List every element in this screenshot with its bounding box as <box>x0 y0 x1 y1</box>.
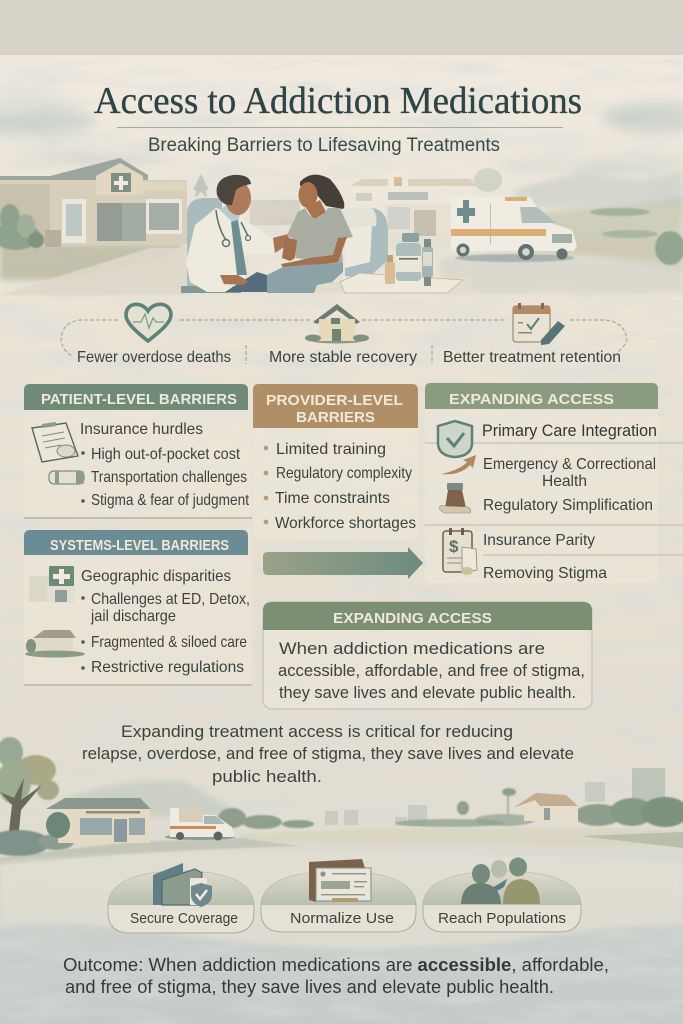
header <box>253 384 418 428</box>
bottom ground band <box>0 851 683 948</box>
barrier list <box>81 568 250 676</box>
house right <box>513 793 578 821</box>
header <box>24 530 248 555</box>
barrier list: Time constraints <box>275 490 390 507</box>
header: EXPANDING ACCESS <box>449 391 614 408</box>
header <box>425 383 658 409</box>
icon: rising arrow <box>441 455 476 474</box>
strategy list: Primary Care Integration <box>482 422 657 440</box>
icon: heart with pulse <box>126 304 171 341</box>
background window block <box>250 200 300 225</box>
distant hospital <box>350 172 480 250</box>
hero illustration <box>0 158 683 295</box>
paragraph <box>82 722 574 786</box>
barrier list: Geographic disparities <box>81 568 231 585</box>
outcome statement: Outcome: When addiction medications are accessible, affordable, <box>63 955 609 975</box>
icon cards <box>108 858 581 933</box>
paragraph: Expanding treatment access is critical for reducing <box>121 722 513 741</box>
icon: house <box>305 304 369 344</box>
strategy list: Regulatory Simplification <box>483 497 653 514</box>
icon: calendar with pen <box>513 303 565 345</box>
benefit labels: Better treatment retention <box>443 349 621 366</box>
summary text <box>278 639 585 702</box>
pharmacy building <box>0 158 187 247</box>
card: normalize use <box>261 859 416 932</box>
header: EXPANDING ACCESS <box>333 611 492 627</box>
patient <box>267 175 353 293</box>
icon: clipboard <box>32 422 78 462</box>
icon: hospital <box>29 566 75 603</box>
top blank band <box>0 0 683 60</box>
distant hills <box>60 780 240 820</box>
panel: expanding access strategies <box>425 383 683 583</box>
right shrubs <box>590 208 683 265</box>
benefit labels: Fewer overdose deaths <box>77 349 231 366</box>
icon: clipboard with dollar: $ <box>449 537 459 556</box>
summary text: When addiction medications are <box>279 639 545 658</box>
barrier list: jail discharge <box>90 608 176 625</box>
benefits row <box>61 303 627 366</box>
barrier list: Limited training <box>276 441 386 458</box>
barrier list: Transportation challenges <box>91 469 247 486</box>
card: reach populations <box>423 858 581 932</box>
strategy list: Insurance Parity <box>483 532 595 549</box>
table <box>314 273 474 293</box>
outcome statement: and free of stigma, they save lives and elevate public health. <box>65 977 554 997</box>
barrier list <box>80 421 249 509</box>
panel: expanding access summary <box>263 602 592 709</box>
icon: shield <box>438 421 472 457</box>
ground and road <box>0 172 683 295</box>
label: Normalize Use <box>290 910 394 927</box>
dashed connector <box>61 320 627 364</box>
panel: provider-level barriers <box>253 384 418 540</box>
strategy list: Removing Stigma <box>483 565 607 582</box>
ground strips <box>0 828 683 866</box>
barrier list: Insurance hurdles <box>80 421 203 438</box>
icon: books and shield <box>153 863 212 907</box>
bush <box>0 204 44 250</box>
paragraph: relapse, overdose, and free of stigma, they save lives and elevate <box>82 744 574 763</box>
arrow <box>263 547 423 579</box>
icon: clinic <box>25 630 85 658</box>
tree line <box>218 788 683 829</box>
icon: pill bottle <box>49 471 84 484</box>
distant skyline <box>325 768 665 826</box>
header <box>263 602 592 630</box>
distant tree <box>193 168 502 198</box>
barrier list: Restrictive regulations <box>91 659 244 676</box>
barrier list <box>264 441 416 532</box>
left tree <box>0 737 74 856</box>
benefit labels <box>77 349 621 366</box>
icon: open binder <box>309 859 371 902</box>
subtitle: Breaking Barriers to Lifesaving Treatments <box>148 135 500 156</box>
barrier list: Regulatory complexity <box>276 465 412 482</box>
title divider <box>117 127 563 128</box>
background clouds <box>0 88 683 174</box>
summary text: accessible, affordable, and free of stigma, <box>278 661 585 680</box>
outcome statement <box>63 955 609 997</box>
icon: clipboard with dollar <box>443 528 477 575</box>
barrier list: High out-of-pocket cost <box>91 446 240 463</box>
strategy list <box>482 422 657 582</box>
header: PROVIDER-LEVEL <box>266 392 403 409</box>
barrier list: Fragmented & siloed care <box>91 634 247 651</box>
panel: systems-level barriers <box>24 530 252 685</box>
barrier list: Challenges at ED, Detox, <box>91 591 250 608</box>
header: SYSTEMS-LEVEL BARRIERS <box>50 538 229 554</box>
header <box>24 384 248 410</box>
header: BARRIERS <box>296 409 375 426</box>
panel: patient-level barriers <box>24 384 252 518</box>
small ambulance <box>165 807 235 840</box>
card: secure coverage <box>108 863 254 933</box>
lower landscape <box>0 737 683 866</box>
header: PATIENT-LEVEL BARRIERS <box>41 392 237 408</box>
icon: mortar <box>440 483 471 513</box>
summary text: they save lives and elevate public health. <box>279 683 576 702</box>
icon: group of people <box>461 858 540 904</box>
barrier list: Stigma & fear of judgment <box>91 492 249 509</box>
medication bottles <box>385 233 433 286</box>
doctor <box>186 175 290 292</box>
title: Access to Addiction Medications <box>94 80 582 122</box>
benefit labels: More stable recovery <box>269 349 417 366</box>
strategy list: Health <box>542 473 587 490</box>
paragraph: public health. <box>212 767 322 786</box>
barrier list: Workforce shortages <box>275 515 416 532</box>
label: Reach Populations <box>438 910 566 927</box>
exam chair <box>181 198 388 293</box>
ambulance <box>451 197 577 262</box>
strategy list: Emergency & Correctional <box>483 456 656 473</box>
clinic building <box>46 798 151 843</box>
label: Secure Coverage <box>130 910 238 927</box>
